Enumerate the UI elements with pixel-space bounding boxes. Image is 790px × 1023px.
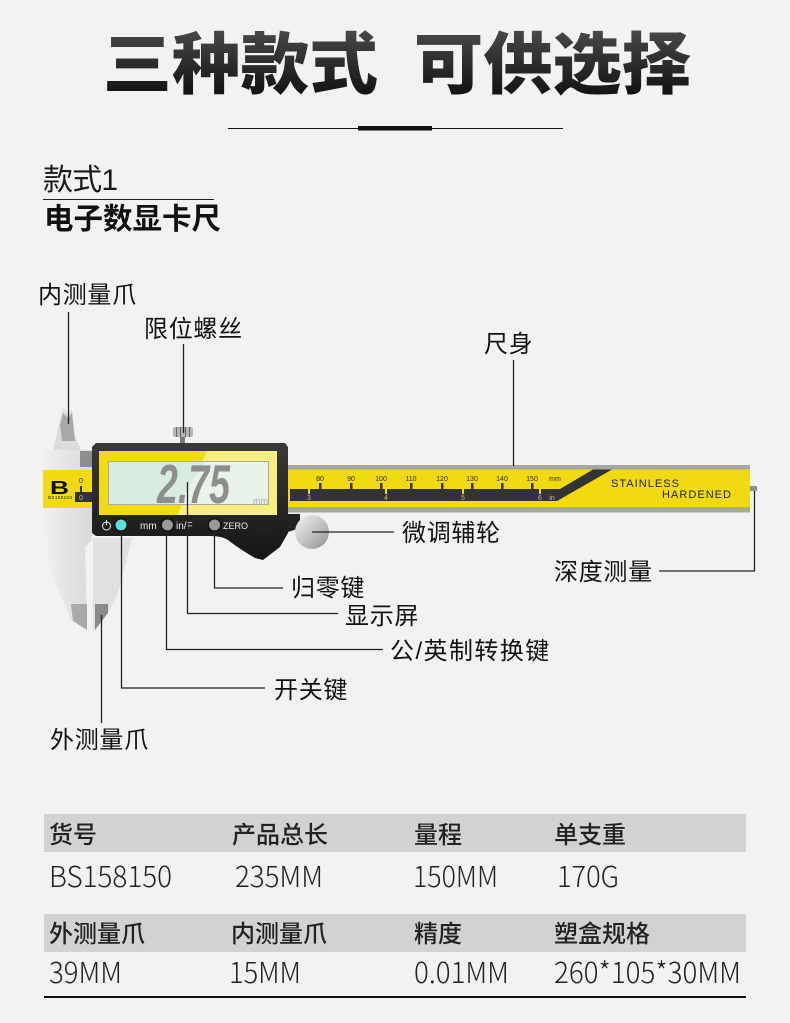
header row 1 [44,814,746,852]
display head [92,443,288,560]
brand mark: B [50,478,69,498]
values row 2 [49,950,741,992]
unit button [140,518,193,532]
leader lines [68,312,754,723]
mm scale: 120 [436,476,448,483]
yellow display frame [99,451,277,515]
header row 2 [44,914,746,952]
header row 1: 单支重 [554,822,626,849]
header row 2: 外测量爪 [49,921,145,948]
lcd reading: 2.75 [156,453,231,515]
callout labels: 外测量爪 [50,727,149,754]
values row 2: 260*105*30MM [554,950,741,992]
mm scale: 6 [538,495,542,502]
depth rod [750,486,757,491]
header row 1: 货号 [49,822,97,849]
values row 1: 150MM [413,854,498,896]
callout labels: 内测量爪 [38,282,137,309]
title: 可供选择 [414,28,691,103]
beam lettering [611,478,731,501]
values row 2: 39MM [49,950,122,992]
callout labels: 开关键 [274,677,348,704]
mm scale: 140 [496,476,508,483]
mm scale: mm [549,476,561,483]
callout labels: 尺身 [484,331,533,358]
caliper illustration [42,408,757,630]
mm scale: 150 [526,476,538,483]
mm scale: 80 [316,476,324,483]
header row 1: 量程 [414,822,462,849]
caliper beam: 0 [79,495,83,502]
mm scale: 4 [384,495,388,502]
outer jaw body [42,450,132,630]
values row 1: BS158150 [49,854,172,896]
mm scale: in [549,495,555,502]
lcd reading: mm [253,496,268,506]
zero button: ZERO [223,521,248,531]
values row 2: 15MM [229,950,301,992]
unit button: mm [140,521,157,532]
callout labels: 深度测量 [554,559,653,586]
brand mark: BS158150 [48,495,72,500]
header row 2: 塑盒规格 [554,921,650,948]
heading: style 1: 电子数显卡尺 [44,203,221,236]
mm scale: 5 [461,495,465,502]
mm scale: 130 [466,476,478,483]
header row 2: 内测量爪 [231,921,327,948]
callout labels [38,282,653,754]
heading: style 1 [43,164,221,236]
limit screw [173,427,193,444]
caliper beam [43,465,750,512]
values row 1 [49,854,619,896]
spec table [44,814,746,998]
callout labels: 限位螺丝 [144,316,243,343]
mm scale: 90 [347,476,355,483]
title [103,28,691,103]
title divider [228,126,563,130]
title: 三种款式 [103,28,378,103]
values row 1: 235MM [235,854,323,896]
beam lettering: HARDENED [662,489,731,501]
callout labels: 微调辅轮 [402,520,501,547]
lcd screen [108,461,269,505]
mm scale: 110 [405,476,417,483]
values row 1: 170G [557,854,619,896]
caliper beam: 0 [79,478,83,485]
callout labels: 归零键 [291,575,365,602]
heading: style 1: 款式1 [43,164,118,197]
header row 1: 产品总长 [232,822,328,849]
mm scale [307,476,561,502]
header row 2: 精度 [414,921,462,948]
thumb wheel [288,514,329,549]
inner measuring jaw [53,408,93,467]
beam lettering: STAINLESS [611,478,679,490]
zero button [208,518,275,532]
power button [102,518,128,532]
brand mark [48,478,72,500]
callout labels: 公/英制转换键 [390,638,550,665]
mm scale: 3 [307,495,311,502]
mm scale: 100 [375,476,387,483]
unit button: in/F [176,521,193,532]
values row 2: 0.01MM [414,950,509,992]
callout labels: 显示屏 [345,603,419,630]
